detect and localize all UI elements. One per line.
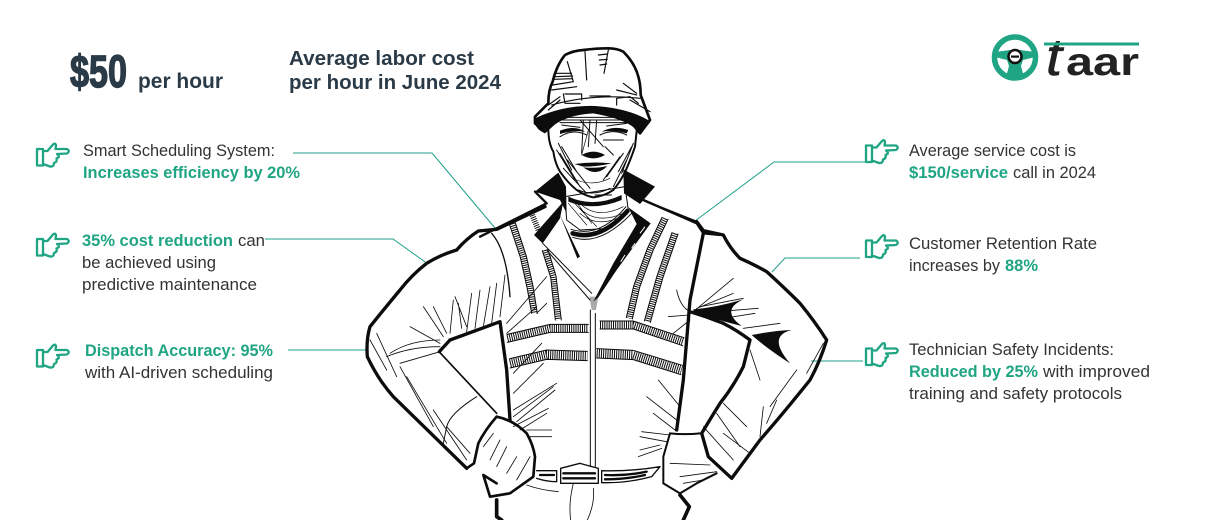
reflective strips [507,215,683,370]
leader lines [265,153,865,361]
callout: smart scheduling: Increases efficiency by 20% [83,164,301,182]
callout: cost reduction: be achieved using [82,254,216,272]
callout: dispatch accuracy [37,342,274,382]
icon: pointing hand [866,343,898,366]
logo: taar: aar [1066,41,1139,84]
heading: average labor cost: Average labor cost [289,47,474,70]
zipper [590,310,595,467]
strip edges [507,217,684,375]
logo: taar: t [1046,29,1065,87]
callout: service cost: Average service cost is [909,142,1076,160]
callout: customer retention [866,235,1097,275]
callout: dispatch accuracy: with AI-driven scheduling [84,364,273,382]
callout: service cost [866,140,1096,182]
illustration: worker [367,48,827,520]
icon: pointing hand [37,234,69,257]
heading: average labor cost [289,47,502,94]
neck [565,187,628,230]
face details [557,117,633,195]
callout: cost reduction: predictive maintenance [82,276,257,294]
trousers [497,495,689,520]
callout: smart scheduling: Smart Scheduling System: [83,142,275,160]
callout: smart scheduling [37,142,301,182]
left hand [467,417,535,497]
callout: cost reduction: 35% cost reduction [82,232,233,250]
callout: cost reduction: can [238,232,265,250]
icon: pointing hand [866,235,898,258]
logo: taar [994,29,1139,87]
belt [537,463,660,483]
callout: cost reduction [37,232,265,294]
stat: $50 per hour: $50 [70,46,127,97]
callout: safety incidents: Technician Safety Incidents: [909,341,1114,359]
jacket collar [593,207,651,302]
callout: customer retention: 88% [1005,257,1039,275]
icon: pointing hand [37,144,69,167]
coat collar [535,169,655,213]
arm and torso outline [367,202,827,520]
face [548,125,637,197]
callout: customer retention: increases by [909,257,1001,275]
sleeve and torso hatching [370,275,557,480]
callout: dispatch accuracy: Dispatch Accuracy: 95% [85,342,274,360]
icon: steering wheel [994,37,1036,78]
callout: safety incidents: Reduced by 25% [909,363,1039,381]
helmet details [548,50,650,112]
callout: safety incidents [866,341,1150,403]
stat: $50 per hour [70,46,223,97]
callout: safety incidents: training and safety protocols [909,385,1122,403]
worker head and helmet [480,48,720,237]
callout: service cost: $150/service [909,164,1008,182]
icon: pointing hand [866,140,898,163]
icon: pointing hand [37,345,69,368]
crew neck [573,210,628,235]
callout: safety incidents: with improved [1042,363,1150,381]
heading: average labor cost: per hour in June 2024 [289,71,502,94]
right hand [663,433,717,493]
helmet [535,48,650,133]
callout: customer retention: Customer Retention Rate [909,235,1097,253]
worker body [367,202,827,520]
callout: service cost: call in 2024 [1013,164,1096,182]
stat: $50 per hour: per hour [138,70,223,93]
